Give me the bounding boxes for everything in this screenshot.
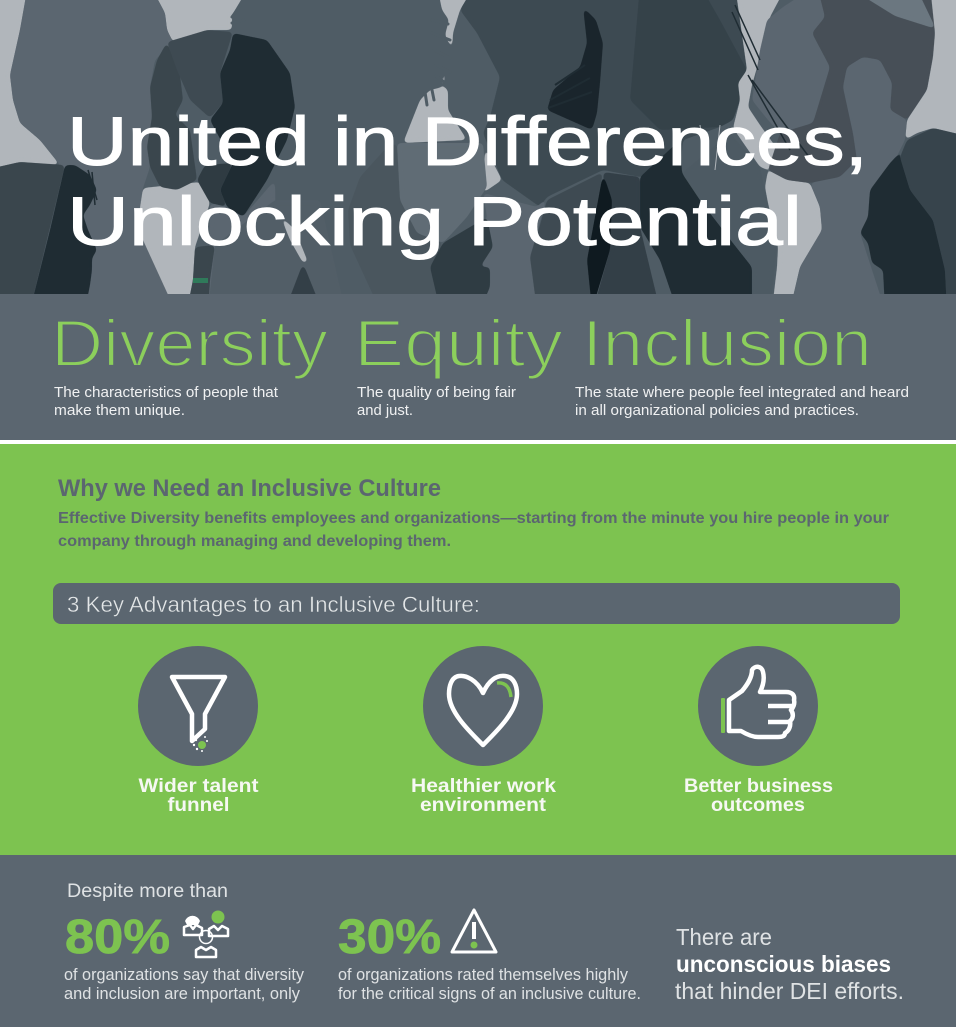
label: wider talent funnel bbox=[138, 775, 259, 816]
heading bar: key advantages bbox=[53, 583, 900, 624]
label: healthier work environment bbox=[411, 775, 556, 816]
definition: equity bbox=[354, 306, 563, 419]
title: Unlocking Potential bbox=[67, 183, 802, 260]
icon: thumbs up bbox=[698, 646, 818, 766]
label: better business outcomes bbox=[684, 775, 833, 816]
stat: 80 percent: and inclusion are important, only bbox=[64, 985, 301, 1003]
text block: unconscious biases: that hinder DEI efforts. bbox=[675, 978, 904, 1004]
definition: diversity bbox=[51, 306, 328, 419]
text block: unconscious biases: There are bbox=[676, 924, 772, 950]
definition: equity: and just. bbox=[357, 403, 413, 419]
label: better business outcomes: Better business bbox=[684, 775, 833, 797]
panel: why inclusive culture bbox=[0, 444, 956, 855]
stat: 30 percent: 30% bbox=[338, 911, 441, 964]
icon: heart bbox=[423, 646, 543, 766]
title bbox=[67, 103, 868, 260]
heading: why we need: Why we Need an Inclusive Culture bbox=[58, 475, 441, 502]
text block: unconscious biases bbox=[675, 924, 904, 1004]
label: better business outcomes: outcomes bbox=[711, 794, 805, 816]
icon: funnel bbox=[138, 646, 258, 766]
stat: 30 percent: for the critical signs of an inclusive culture. bbox=[338, 985, 641, 1003]
text block: unconscious biases: unconscious biases bbox=[676, 951, 891, 977]
heading bar: key advantages: 3 Key Advantages to an Inclusive Culture: bbox=[67, 592, 480, 617]
definition: diversity: Diversity bbox=[51, 306, 328, 380]
stat: 80 percent: of organizations say that diversity bbox=[64, 966, 305, 984]
stat: 80 percent: 80% bbox=[65, 911, 170, 964]
panel: statistics bbox=[0, 855, 956, 1027]
text block: intro: company through managing and developing them. bbox=[58, 533, 451, 550]
title: United in Differences, bbox=[67, 103, 868, 180]
definition: inclusion: The state where people feel integrated and heard bbox=[575, 385, 909, 401]
label: healthier work environment: Healthier work bbox=[411, 775, 556, 797]
label: wider talent funnel: Wider talent bbox=[138, 775, 259, 797]
stat: 30 percent bbox=[338, 911, 641, 1003]
icon: people bbox=[184, 910, 228, 957]
definition: diversity: The characteristics of people that bbox=[54, 385, 278, 401]
text block: intro: Effective Diversity benefits employees and organizations—starting from the minute you hire people in your bbox=[58, 510, 889, 527]
panel: hero silhouettes bbox=[0, 0, 956, 294]
definition: equity: Equity bbox=[354, 306, 563, 380]
stat: 80 percent: Despite more than bbox=[67, 881, 228, 902]
definition: inclusion: Inclusion bbox=[582, 306, 872, 380]
definition: diversity: make them unique. bbox=[54, 403, 185, 419]
stat: 80 percent bbox=[64, 881, 305, 1003]
text block: intro bbox=[58, 510, 889, 550]
icon: warning triangle bbox=[452, 910, 496, 952]
definition: equity: The quality of being fair bbox=[357, 385, 516, 401]
stat: 30 percent: of organizations rated themselves highly bbox=[338, 966, 629, 984]
definition: inclusion bbox=[575, 306, 909, 419]
label: healthier work environment: environment bbox=[420, 794, 547, 816]
definition: inclusion: in all organizational policies and practices. bbox=[575, 403, 859, 419]
label: wider talent funnel: funnel bbox=[168, 794, 230, 816]
panel: definitions band bbox=[0, 294, 956, 440]
